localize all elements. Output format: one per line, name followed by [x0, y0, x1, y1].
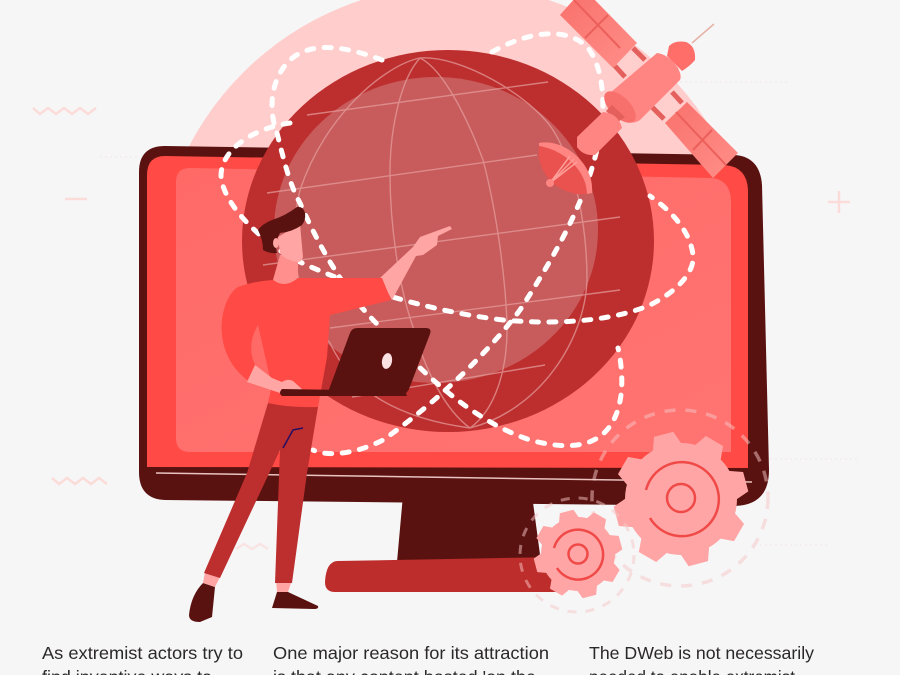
- small gear body: [533, 509, 623, 599]
- monitor highlight line: [156, 473, 752, 482]
- text column one: [42, 643, 243, 675]
- trouser pocket line: [283, 428, 303, 448]
- screen inner panel: [176, 168, 731, 452]
- satellite antenna: [692, 24, 714, 43]
- pink background circle: [189, 0, 706, 154]
- monitor: [139, 146, 769, 592]
- monitor screen: [147, 156, 748, 468]
- satellite dish rim: [539, 142, 592, 194]
- satellite upper solar panel: [560, 0, 637, 68]
- large gear rings: [646, 462, 719, 536]
- satellite lower module: [577, 112, 622, 155]
- person head: [278, 224, 303, 262]
- globe inner sphere: [274, 77, 598, 383]
- person left shoe: [189, 583, 215, 622]
- small gear: [520, 498, 634, 612]
- text column three: The DWeb is not necessarily: [589, 643, 814, 663]
- large gear dashed ring: [592, 410, 768, 586]
- person neck: [273, 255, 298, 284]
- text column one: As extremist actors try to: [42, 643, 243, 663]
- satellite lower panel seams: [676, 112, 726, 165]
- small gear rings: [554, 530, 603, 580]
- satellite main body: [610, 53, 681, 123]
- satellite dish tip: [546, 179, 554, 187]
- orbit paths: [221, 34, 693, 454]
- large gear body: [612, 430, 750, 568]
- satellite upper panel seams: [574, 0, 620, 48]
- globe: [242, 50, 654, 432]
- large gear: [592, 410, 768, 586]
- monitor frame: [139, 146, 769, 506]
- laptop lid: [328, 328, 430, 394]
- satellite lower solar panel: [665, 102, 738, 178]
- orbit three: [313, 34, 603, 454]
- satellite dish: [539, 144, 590, 194]
- satellite panel connectors: [615, 48, 682, 119]
- person trousers: [204, 403, 318, 583]
- satellite body end: [599, 86, 641, 128]
- satellite neck: [606, 105, 625, 122]
- text column two: [273, 643, 549, 675]
- satellite: [539, 0, 738, 194]
- person hair: [258, 207, 305, 253]
- person shirt: [222, 278, 391, 407]
- orbit two: [221, 123, 693, 322]
- person forearm: [380, 226, 452, 300]
- background decorations: [33, 82, 860, 549]
- person ear: [273, 238, 279, 248]
- text column two: One major reason for its attraction: [273, 643, 549, 663]
- satellite dome: [667, 42, 695, 71]
- globe grid lines: [263, 58, 620, 428]
- person right shoe: [272, 592, 318, 609]
- person arm gap: [251, 325, 270, 378]
- person waist hand: [247, 365, 303, 393]
- laptop base: [280, 389, 407, 396]
- satellite dish feed: [550, 156, 577, 183]
- laptop: [280, 328, 430, 396]
- monitor base: [325, 557, 560, 592]
- monitor stand: [397, 495, 541, 562]
- orbit one: [272, 48, 622, 446]
- laptop logo: [381, 352, 393, 370]
- globe outer sphere: [242, 50, 654, 432]
- small gear dashed ring: [520, 498, 634, 612]
- person ankles: [203, 572, 292, 592]
- person: [189, 207, 452, 622]
- text column three: [589, 643, 814, 675]
